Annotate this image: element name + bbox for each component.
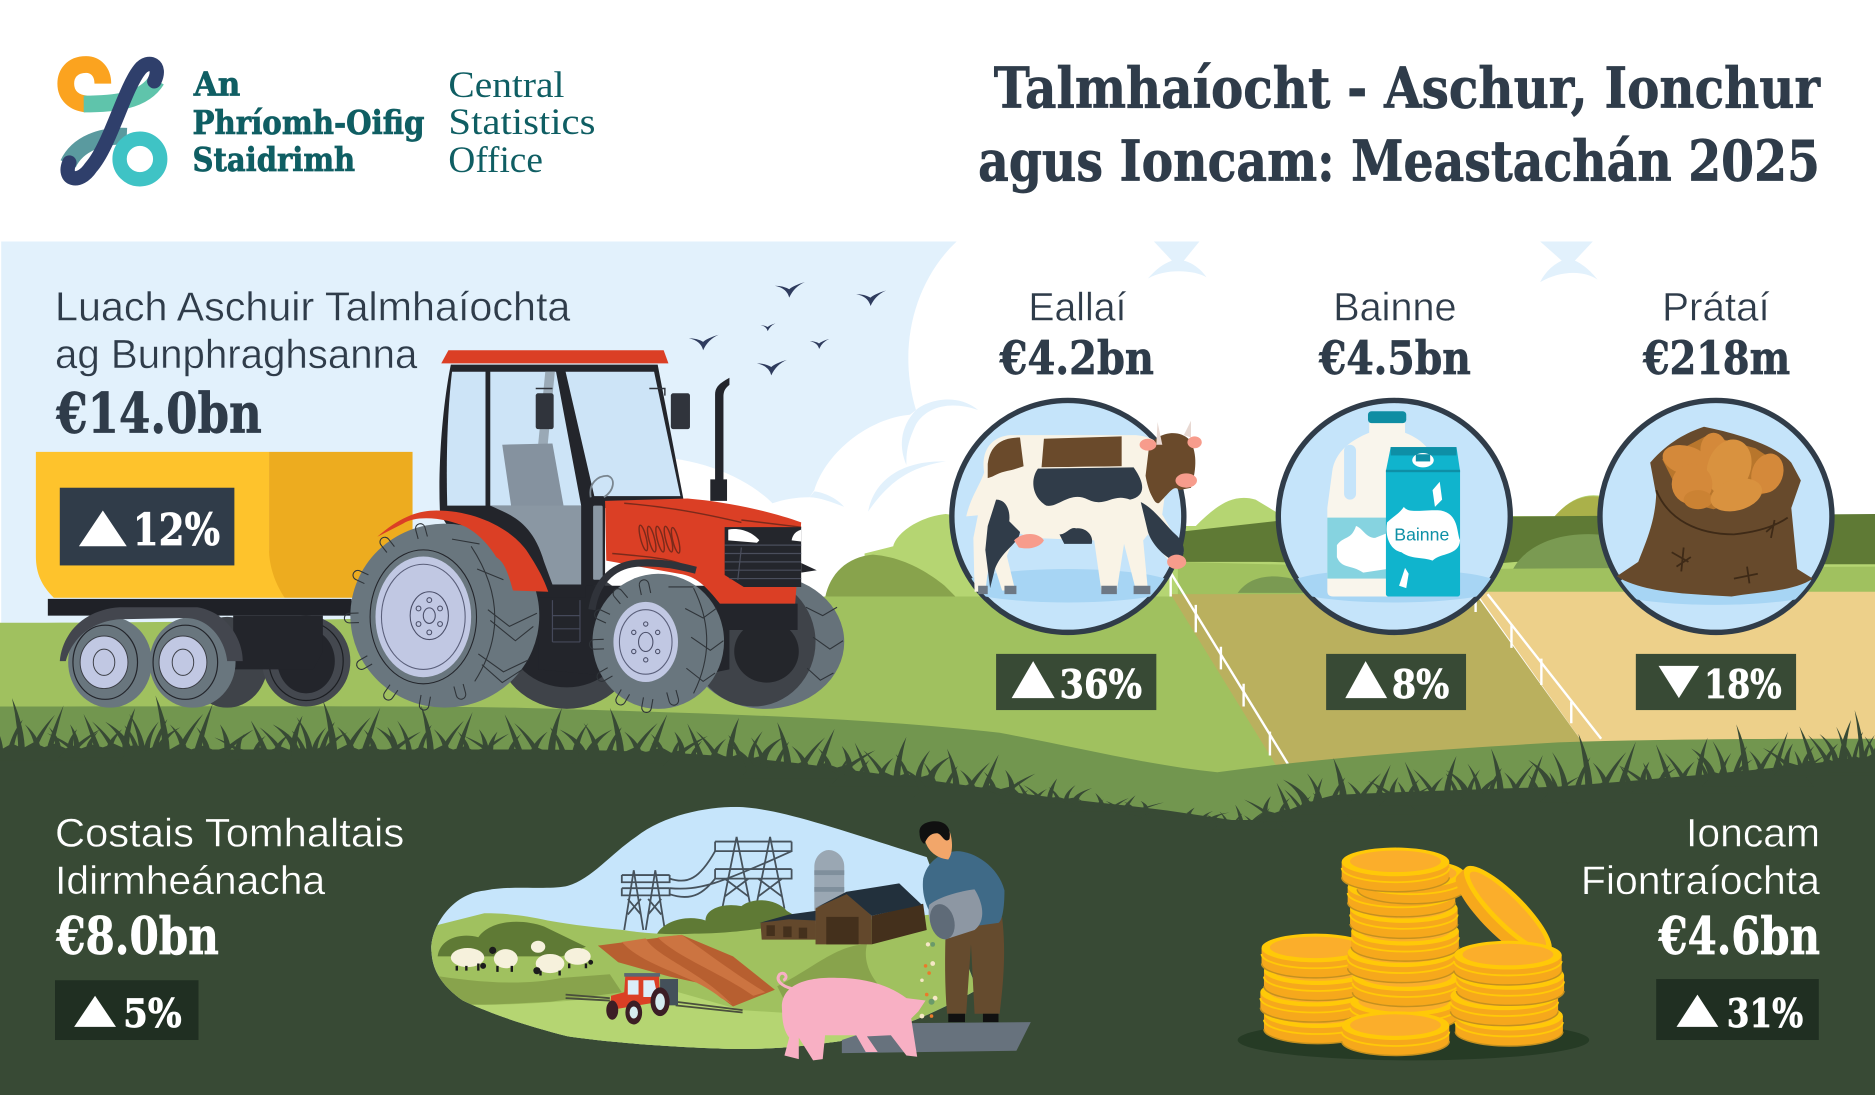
trailer far wheels bbox=[187, 616, 350, 708]
trailer fender bbox=[60, 607, 243, 661]
output heading bbox=[55, 283, 571, 377]
logo text: Irish: An bbox=[193, 66, 240, 104]
logo text: Irish: Staidrimh bbox=[193, 141, 355, 179]
hood bbox=[605, 498, 801, 604]
logo mark bbox=[66, 64, 160, 179]
ploughed field bbox=[598, 935, 775, 1007]
icon: milk carton: Bainne bbox=[1394, 524, 1449, 544]
front arch bbox=[592, 563, 696, 610]
farmer boots bbox=[948, 1014, 998, 1022]
cattle badge: 36% bbox=[1059, 662, 1142, 708]
silo bbox=[814, 850, 844, 914]
background hills bbox=[825, 495, 1875, 598]
pig bbox=[778, 973, 926, 1060]
logo text: Irish: Phríomh-Oifig bbox=[193, 104, 425, 142]
output heading: Luach Aschuir Talmhaíochta bbox=[55, 283, 571, 329]
front wheel bbox=[589, 574, 724, 713]
ground and fields bbox=[0, 592, 1875, 777]
grille bbox=[725, 527, 817, 587]
logo text: English: Office bbox=[448, 140, 543, 181]
icon: milk jug bbox=[1327, 411, 1439, 597]
logo text: Irish bbox=[193, 66, 425, 179]
farm income panel bbox=[1581, 811, 1820, 1040]
up arrow bbox=[79, 510, 127, 546]
milk badge: 8% bbox=[1392, 662, 1449, 708]
trailer chassis bbox=[48, 599, 352, 669]
potatoes badge bbox=[1636, 654, 1796, 710]
costs heading bbox=[55, 811, 404, 903]
milk value: €4.5bn bbox=[1318, 331, 1471, 385]
cab frame bbox=[439, 365, 684, 598]
intermediate costs panel bbox=[55, 811, 404, 1040]
down arrow bbox=[1659, 666, 1699, 698]
cattle circle bbox=[952, 400, 1184, 632]
milk circle bbox=[1278, 400, 1510, 632]
birds bbox=[689, 282, 886, 375]
sky panel bbox=[1, 241, 1598, 634]
potatoes circle bbox=[1600, 400, 1832, 632]
income badge: 31% bbox=[1727, 991, 1803, 1037]
dark foreground with grass bbox=[0, 695, 1875, 1095]
tractor with trailer bbox=[36, 350, 844, 713]
output value: €14.0bn bbox=[55, 381, 262, 446]
mirrors bbox=[536, 389, 690, 429]
logo text: English: Statistics bbox=[448, 102, 596, 143]
scene landscape bbox=[431, 806, 974, 1049]
trough bbox=[842, 1022, 1031, 1053]
cab interior bbox=[490, 372, 613, 585]
costs badge: 5% bbox=[123, 991, 182, 1037]
cattle value: €4.2bn bbox=[999, 331, 1154, 385]
income heading bbox=[1581, 811, 1820, 903]
farm scene illustration bbox=[419, 801, 1031, 1060]
logo text: English bbox=[448, 65, 596, 181]
potatoes label: Prátaí bbox=[1662, 285, 1770, 329]
chassis bbox=[538, 586, 798, 681]
farmer jumper bbox=[923, 851, 1004, 930]
costs value: €8.0bn bbox=[55, 907, 219, 967]
income heading: Ioncam bbox=[1686, 811, 1820, 855]
potatoes panel bbox=[1600, 285, 1832, 710]
trailer near wheels bbox=[68, 617, 236, 708]
pylons bbox=[622, 837, 792, 930]
trailer box bbox=[36, 452, 413, 598]
barn bbox=[759, 883, 927, 944]
farmer trousers bbox=[945, 917, 1004, 1014]
far front wheel bbox=[686, 575, 844, 709]
potatoes value: €218m bbox=[1642, 331, 1790, 385]
cattle panel bbox=[952, 285, 1202, 710]
cab windows bbox=[447, 372, 680, 506]
sheep bbox=[451, 941, 593, 975]
income heading: Fiontraíochta bbox=[1581, 859, 1820, 903]
icon: milk carton bbox=[1386, 447, 1460, 597]
far rear wheel bbox=[495, 570, 639, 709]
scene hills bbox=[438, 922, 586, 956]
output change badge: 12% bbox=[133, 504, 220, 556]
main ground bbox=[431, 913, 974, 1049]
income badge bbox=[1656, 979, 1819, 1040]
right coin stack bbox=[1450, 941, 1564, 1046]
farmer head bbox=[924, 831, 952, 860]
left coin stack bbox=[1260, 934, 1372, 1044]
farmer bbox=[919, 821, 1004, 1022]
icon: black and white cow bbox=[973, 466, 1186, 594]
title bbox=[978, 56, 1821, 195]
milk label: Bainne bbox=[1333, 285, 1456, 329]
milk panel bbox=[1278, 285, 1510, 710]
rear fender bbox=[377, 510, 548, 592]
cattle badge bbox=[996, 654, 1156, 710]
roof bbox=[441, 350, 668, 363]
exhaust pipe bbox=[710, 378, 729, 501]
icon: potato sack bbox=[1617, 427, 1813, 597]
cattle label: Eallaí bbox=[1028, 285, 1126, 329]
output text block bbox=[55, 283, 571, 446]
coin stacks bbox=[1238, 848, 1589, 1060]
costs badge bbox=[55, 980, 199, 1040]
farmer hair bbox=[919, 821, 950, 844]
vents bbox=[612, 503, 801, 564]
milk badge bbox=[1326, 654, 1466, 710]
logo bbox=[66, 64, 596, 181]
mid-green foreground band bbox=[0, 706, 1875, 861]
bucket bbox=[929, 889, 982, 940]
output change badge bbox=[60, 488, 234, 565]
logo text: English: Central bbox=[448, 65, 564, 106]
front coin bbox=[1342, 1011, 1449, 1056]
potatoes badge: 18% bbox=[1704, 662, 1782, 708]
income value: €4.6bn bbox=[1658, 907, 1820, 967]
scene bushes bbox=[657, 900, 792, 934]
middle coin stack bbox=[1342, 848, 1465, 1032]
icon: brown cow bbox=[966, 421, 1202, 516]
costs heading: Idirmheánacha bbox=[55, 859, 325, 903]
small tractor with sprayer bbox=[566, 973, 743, 1024]
coin shadow bbox=[1238, 1020, 1589, 1060]
output heading: ag Bunphraghsanna bbox=[55, 331, 418, 377]
costs heading: Costais Tomhaltais bbox=[55, 811, 404, 855]
rear wheel bbox=[344, 523, 539, 711]
falling feed bbox=[920, 942, 938, 1018]
fences bbox=[1171, 573, 1601, 764]
leaning coin bbox=[1446, 856, 1562, 971]
ladder bbox=[552, 600, 580, 642]
